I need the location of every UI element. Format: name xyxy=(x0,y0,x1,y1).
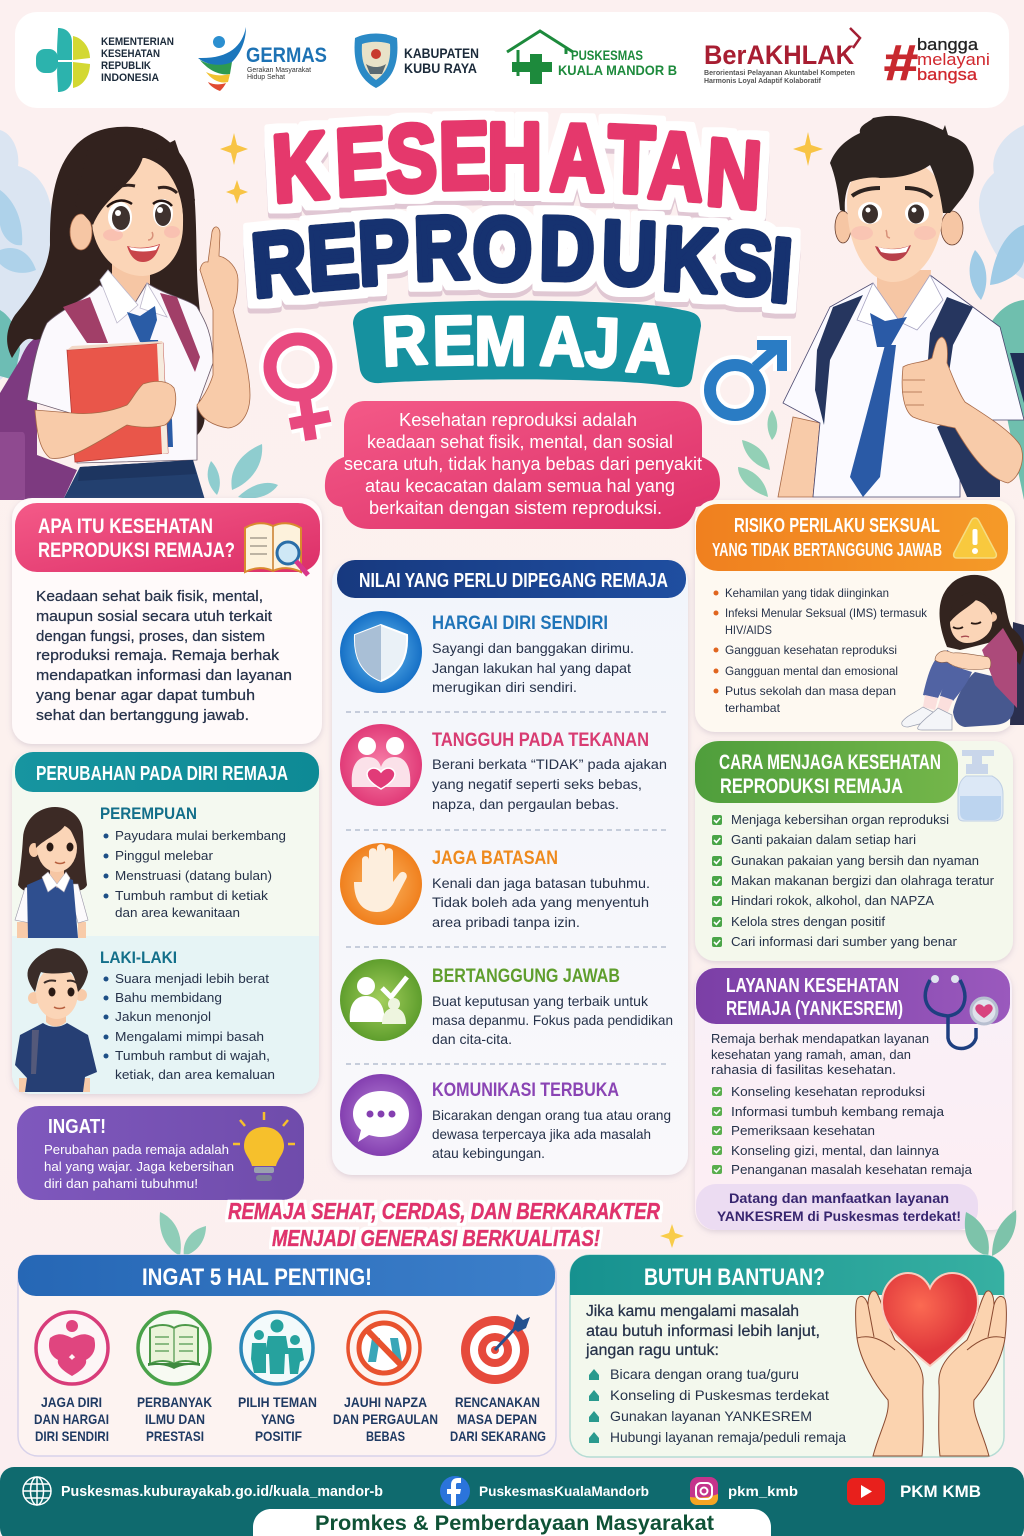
icon: self care circle xyxy=(36,1312,108,1384)
item: bertanggung jawab: Buat keputusan yang terbaik untuk xyxy=(432,993,649,1009)
icon: light bulb xyxy=(233,1112,295,1181)
item: hargai diri sendiri: HARGAI DIRI SENDIRI xyxy=(432,613,608,634)
slogan xyxy=(228,1198,660,1251)
icon: chat bubble xyxy=(340,1074,422,1156)
logo: Kementerian Kesehatan xyxy=(36,28,174,92)
callout: datang dan manfaatkan: Datang dan manfaatkan layanan xyxy=(729,1190,949,1206)
header logo bar xyxy=(15,12,1009,108)
icon: stop hand xyxy=(340,843,422,925)
item: jaga diri xyxy=(34,1312,109,1444)
item: jaga batasan: area pribadi tanpa izin. xyxy=(432,914,580,930)
logo: Kubu Raya: KUBU RAYA xyxy=(404,60,477,76)
callout: datang dan manfaatkan: YANKESREM di Puskesmas terdekat! xyxy=(717,1208,961,1224)
bullet list: terhambat xyxy=(725,701,781,715)
service description: rahasia di fasilitas kesehatan. xyxy=(711,1063,896,1077)
item: hargai diri sendiri: Jangan lakukan hal yang dapat xyxy=(432,660,631,676)
icon: warning triangle xyxy=(954,518,996,558)
logo: Germas: Gerakan Masyarakat xyxy=(247,67,311,74)
footer: PuskesmasKualaMandorb xyxy=(479,1483,649,1499)
slogan: REMAJA SEHAT, CERDAS, DAN BERKARAKTER xyxy=(228,1198,660,1224)
panel header xyxy=(18,1255,555,1296)
icon: mars symbol xyxy=(710,345,782,415)
logo: BerAKHLAK: Berorientasi Pelayanan Akuntabel Kompeten xyxy=(704,68,855,77)
item: perbanyak ilmu: ILMU DAN xyxy=(145,1411,205,1427)
logo: Kubu Raya: KABUPATEN xyxy=(404,45,479,61)
title: KESEHATAN xyxy=(270,103,764,230)
item: komunikasi terbuka: dewasa terpercaya jika ada masalah xyxy=(432,1126,651,1142)
panel header: INGAT 5 HAL PENTING! xyxy=(142,1264,372,1291)
text: laki-laki: ketiak, dan area kemaluan xyxy=(115,1067,275,1082)
illustration: boy with thumbs up xyxy=(778,116,1024,497)
icon: shield xyxy=(340,611,422,693)
callout: ingat: diri dan pahami tubuhmu! xyxy=(44,1177,198,1191)
item: perbanyak ilmu xyxy=(137,1312,212,1444)
title xyxy=(248,103,796,389)
panel: perubahan pada diri remaja xyxy=(12,752,319,1094)
panel body text: maupun sosial secara utuh terkait xyxy=(36,608,273,625)
intro definition box: berkaitan dengan sistem reproduksi. xyxy=(369,498,662,518)
text: perempuan: Tumbuh rambut di ketiak xyxy=(115,888,269,903)
icon: open book circle xyxy=(138,1312,210,1384)
icon: people with heart xyxy=(340,724,422,806)
panel body text: dengan fungsi, proses, dan sistem xyxy=(36,628,265,645)
text: perempuan: Payudara mulai berkembang xyxy=(115,828,286,843)
checklist: Pemeriksaan kesehatan xyxy=(731,1123,875,1138)
bullet list: Putus sekolah dan masa depan xyxy=(725,684,896,698)
item: tangguh pada tekanan xyxy=(340,724,667,812)
checklist: Informasi tumbuh kembang remaja xyxy=(731,1104,945,1119)
intro definition box: atau kecacatan dalam semua hal yang xyxy=(365,476,675,496)
logo: bangga melayani bangsa: # xyxy=(884,35,918,91)
item: tangguh pada tekanan: napza, dan pergaulan bebas. xyxy=(432,796,619,812)
text: perempuan: Pinggul melebar xyxy=(115,848,214,863)
panel body text: sehat dan bertanggung jawab. xyxy=(36,707,249,724)
item: pilih teman: YANG xyxy=(261,1411,295,1427)
bullet list: Kehamilan yang tidak diinginkan xyxy=(725,586,889,600)
logo: BerAKHLAK: Harmonis Loyal Adaptif Kolaboratif xyxy=(704,76,821,85)
panel header: BUTUH BANTUAN? xyxy=(644,1264,825,1291)
item: tangguh pada tekanan: yang negatif seperti seks bebas, xyxy=(432,776,642,792)
help options list: Konseling di Puskesmas terdekat xyxy=(610,1387,829,1403)
decorative leaves and sparkle near slogan xyxy=(160,1210,1016,1256)
item: komunikasi terbuka xyxy=(340,1074,671,1161)
logo: Germas xyxy=(198,27,327,91)
intro definition box xyxy=(325,401,720,529)
logo: Kementerian Kesehatan: REPUBLIK xyxy=(101,60,151,72)
intro definition box: secara utuh, tidak hanya bebas dari penyakit xyxy=(344,454,702,474)
panel header xyxy=(695,741,958,803)
panel header: PERUBAHAN PADA DIRI REMAJA xyxy=(36,763,288,785)
logo: Kementerian Kesehatan: INDONESIA xyxy=(101,72,159,84)
panel: risiko perilaku seksual xyxy=(695,500,1024,732)
item: bertanggung jawab: dan cita-cita. xyxy=(432,1031,512,1047)
panel: apa itu kesehatan reproduksi remaja xyxy=(12,498,322,744)
illustration: sad sitting girl xyxy=(902,575,1024,730)
service description: Remaja berhak mendapatkan layanan xyxy=(711,1032,929,1046)
item: rencanakan masa depan: DARI SEKARANG xyxy=(450,1428,546,1444)
item: tangguh pada tekanan: Berani berkata “TIDAK” pada ajakan xyxy=(432,756,667,772)
icon: venus symbol xyxy=(270,339,330,440)
logo: Kementerian Kesehatan: KESEHATAN xyxy=(101,48,160,60)
item: komunikasi terbuka: KOMUNIKASI TERBUKA xyxy=(432,1080,619,1101)
panel header xyxy=(570,1255,1004,1295)
footer: Puskesmas.kuburayakab.go.id/kuala_mandor-b xyxy=(61,1484,383,1500)
checklist: Kelola stres dengan positif xyxy=(731,914,885,929)
logo: Puskesmas Kuala Mandor B: PUSKESMAS xyxy=(571,47,643,63)
slogan: MENJADI GENERASI BERKUALITAS! xyxy=(272,1225,600,1251)
text: laki-laki xyxy=(100,948,275,1082)
callout: datang dan manfaatkan xyxy=(696,1184,978,1230)
checklist: Konseling gizi, mental, dan lainnya xyxy=(731,1143,940,1158)
text: laki-laki: Bahu membidang xyxy=(115,990,222,1005)
checklist: Cari informasi dari sumber yang benar xyxy=(731,934,958,949)
logo: bangga melayani bangsa xyxy=(884,35,990,91)
logo: Kementerian Kesehatan: KEMENTERIAN xyxy=(101,36,174,48)
panel header xyxy=(15,752,319,792)
checklist: Penanganan masalah kesehatan remaja xyxy=(731,1162,973,1177)
logo: BerAKHLAK xyxy=(704,28,860,85)
callout: ingat: INGAT! xyxy=(48,1116,106,1138)
bullet list xyxy=(714,586,928,715)
panel: cara menjaga kesehatan xyxy=(695,741,1013,961)
bullet list: HIV/AIDS xyxy=(725,623,772,637)
panel header xyxy=(15,503,320,572)
icon: stethoscope xyxy=(925,975,997,1048)
checklist: Menjaga kebersihan organ reproduksi xyxy=(731,812,949,827)
title: REPRODUKSI xyxy=(248,196,796,322)
text: perempuan: PEREMPUAN xyxy=(100,804,197,823)
item: jaga batasan: JAGA BATASAN xyxy=(432,848,558,869)
item: jaga batasan xyxy=(340,843,650,930)
panel header: NILAI YANG PERLU DIPEGANG REMAJA xyxy=(359,570,668,592)
logo: bangga melayani bangsa: bangsa xyxy=(917,66,978,84)
text: laki-laki: Tumbuh rambut di wajah, xyxy=(115,1048,270,1063)
help options list xyxy=(589,1366,846,1445)
checklist xyxy=(712,812,995,949)
item: rencanakan masa depan: MASA DEPAN xyxy=(457,1411,537,1427)
item: komunikasi terbuka: atau kebingungan. xyxy=(432,1145,545,1161)
body text xyxy=(585,1303,820,1359)
illustration: girl avatar xyxy=(15,807,88,938)
footer: PKM KMB xyxy=(900,1482,981,1501)
item: hargai diri sendiri xyxy=(340,611,634,695)
checklist: Makan makanan bergizi dan olahraga teratur xyxy=(731,873,995,888)
panel body text: reproduksi remaja. Remaja berhak xyxy=(36,647,280,664)
item: perbanyak ilmu: PERBANYAK xyxy=(137,1394,212,1410)
item: rencanakan masa depan: RENCANAKAN xyxy=(455,1394,540,1410)
panel body text xyxy=(36,588,292,724)
icon: facebook xyxy=(440,1476,470,1506)
icon: book and magnifier xyxy=(245,523,308,575)
panel header: LAYANAN KESEHATAN xyxy=(726,975,899,997)
icon: group of people circle xyxy=(241,1312,313,1384)
panel header: APA ITU KESEHATAN xyxy=(38,515,213,538)
item: jauhi napza xyxy=(333,1312,438,1444)
text: laki-laki: LAKI-LAKI xyxy=(100,948,177,967)
item: pilih teman xyxy=(238,1312,317,1444)
footer xyxy=(0,1467,1024,1536)
logo: Puskesmas Kuala Mandor B: KUALA MANDOR B xyxy=(558,62,677,78)
panel: ingat 5 hal penting xyxy=(18,1255,556,1456)
body text: Jika kamu mengalami masalah xyxy=(586,1303,799,1320)
body text: atau butuh informasi lebih lanjut, xyxy=(586,1323,820,1340)
callout: ingat xyxy=(17,1106,304,1200)
logo: bangga melayani bangsa: bangga xyxy=(917,36,979,54)
item: jauhi napza: DAN PERGAULAN xyxy=(333,1411,438,1427)
footer credit pill xyxy=(253,1509,771,1536)
item: jaga diri: DIRI SENDIRI xyxy=(35,1428,109,1444)
help options list: Hubungi layanan remaja/peduli remaja xyxy=(610,1429,846,1445)
item: pilih teman: POSITIF xyxy=(255,1428,302,1444)
bullet list: Gangguan mental dan emosional xyxy=(725,664,898,678)
bullet list: Infeksi Menular Seksual (IMS) termasuk xyxy=(725,606,928,620)
title banner: REMAJA: REMAJA xyxy=(380,301,673,389)
text: laki-laki: Suara menjadi lebih berat xyxy=(115,971,269,986)
text: perempuan: dan area kewanitaan xyxy=(115,905,240,920)
panel header: RISIKO PERILAKU SEKSUAL xyxy=(734,515,940,537)
item: bertanggung jawab: BERTANGGUNG JAWAB xyxy=(432,966,620,987)
panel: butuh bantuan xyxy=(570,1255,1006,1457)
item: pilih teman: PILIH TEMAN xyxy=(238,1394,317,1410)
panel header xyxy=(337,560,686,598)
text: laki-laki: Mengalami mimpi basah xyxy=(115,1029,264,1044)
panel body text: Keadaan sehat baik fisik, mental, xyxy=(36,588,263,605)
item: hargai diri sendiri: Sayangi dan banggakan dirimu. xyxy=(432,640,634,656)
body text: jangan ragu untuk: xyxy=(585,1342,719,1359)
item: bertanggung jawab: masa depanmu. Fokus pada pendidikan xyxy=(432,1012,673,1028)
panel: nilai yang perlu dipegang remaja xyxy=(332,560,688,1175)
checklist: Gunakan pakaian yang bersih dan nyaman xyxy=(731,853,979,868)
logo: Germas: GERMAS xyxy=(246,44,327,67)
icon: prohibited circle xyxy=(348,1312,420,1384)
logo: BerAKHLAK: BerAKHLAK xyxy=(704,40,854,70)
panel header: REPRODUKSI REMAJA? xyxy=(38,539,235,562)
icon: target with arrow xyxy=(461,1314,530,1384)
item: tangguh pada tekanan: TANGGUH PADA TEKANAN xyxy=(432,730,649,751)
panel header xyxy=(696,504,1008,571)
text: perempuan: Menstruasi (datang bulan) xyxy=(115,868,272,883)
icon: instagram xyxy=(690,1477,718,1505)
illustration: hands holding heart xyxy=(856,1273,1006,1456)
logo: Germas: Hidup Sehat xyxy=(247,74,285,81)
panel header: REPRODUKSI REMAJA xyxy=(720,775,903,798)
service description: kesehatan yang ramah, aman, dan xyxy=(711,1048,911,1062)
item: jaga diri: JAGA DIRI xyxy=(41,1394,102,1410)
footer credit pill: Promkes & Pemberdayaan Masyarakat xyxy=(315,1512,714,1535)
bullet list: Gangguan kesehatan reproduksi xyxy=(725,643,897,657)
item: komunikasi terbuka: Bicarakan dengan orang tua atau orang xyxy=(432,1107,671,1123)
intro definition box: Kesehatan reproduksi adalah xyxy=(399,410,637,430)
icon: globe xyxy=(23,1477,51,1505)
item: jaga diri: DAN HARGAI xyxy=(34,1411,109,1427)
item: perbanyak ilmu: PRESTASI xyxy=(146,1428,204,1444)
intro definition box: keadaan sehat fisik, mental, dan sosial xyxy=(367,432,673,452)
panel header: CARA MENJAGA KESEHATAN xyxy=(719,751,941,774)
logo: Kubu Raya xyxy=(355,34,479,88)
icon: youtube xyxy=(847,1478,885,1505)
callout: ingat: Perubahan pada remaja adalah xyxy=(44,1143,229,1157)
checklist: Konseling kesehatan reproduksi xyxy=(731,1084,925,1099)
item: jauhi napza: JAUHI NAPZA xyxy=(344,1394,427,1410)
checklist: Ganti pakaian dalam setiap hari xyxy=(731,832,916,847)
checklist xyxy=(712,1084,973,1177)
icon: soap bottle xyxy=(958,750,1003,821)
checklist: Hindari rokok, alkohol, dan NAPZA xyxy=(731,893,934,908)
logo: Puskesmas Kuala Mandor B xyxy=(507,31,677,84)
illustration: boy avatar xyxy=(15,948,97,1092)
item: hargai diri sendiri: merugikan diri sendiri. xyxy=(432,679,577,695)
text: perempuan xyxy=(100,804,286,920)
help options list: Gunakan layanan YANKESREM xyxy=(610,1408,812,1424)
item: jauhi napza: BEBAS xyxy=(366,1428,405,1444)
decorative sparkles and leaves xyxy=(208,132,823,498)
service description xyxy=(711,1032,929,1077)
panel header xyxy=(696,968,1010,1024)
footer: pkm_kmb xyxy=(728,1483,798,1499)
item: rencanakan masa depan xyxy=(450,1314,546,1444)
logo: bangga melayani bangsa: melayani xyxy=(917,51,990,69)
panel body text: mendapatkan informasi dan layanan xyxy=(36,667,292,684)
icon: person with check xyxy=(340,959,422,1041)
panel: layanan kesehatan remaja xyxy=(695,968,1012,1230)
illustration: girl with book xyxy=(0,127,250,500)
text: laki-laki: Jakun menonjol xyxy=(115,1009,211,1024)
callout: ingat: hal yang wajar. Jaga kebersihan xyxy=(44,1160,234,1174)
item: bertanggung jawab xyxy=(340,959,673,1047)
panel body text: yang benar agar dapat tumbuh xyxy=(36,687,255,704)
item: jaga batasan: Kenali dan jaga batasan tubuhmu. xyxy=(432,875,650,891)
item: jaga batasan: Tidak boleh ada yang menyentuh xyxy=(432,894,649,910)
help options list: Bicara dengan orang tua/guru xyxy=(610,1366,799,1382)
panel header: REMAJA (YANKESREM) xyxy=(726,998,903,1020)
